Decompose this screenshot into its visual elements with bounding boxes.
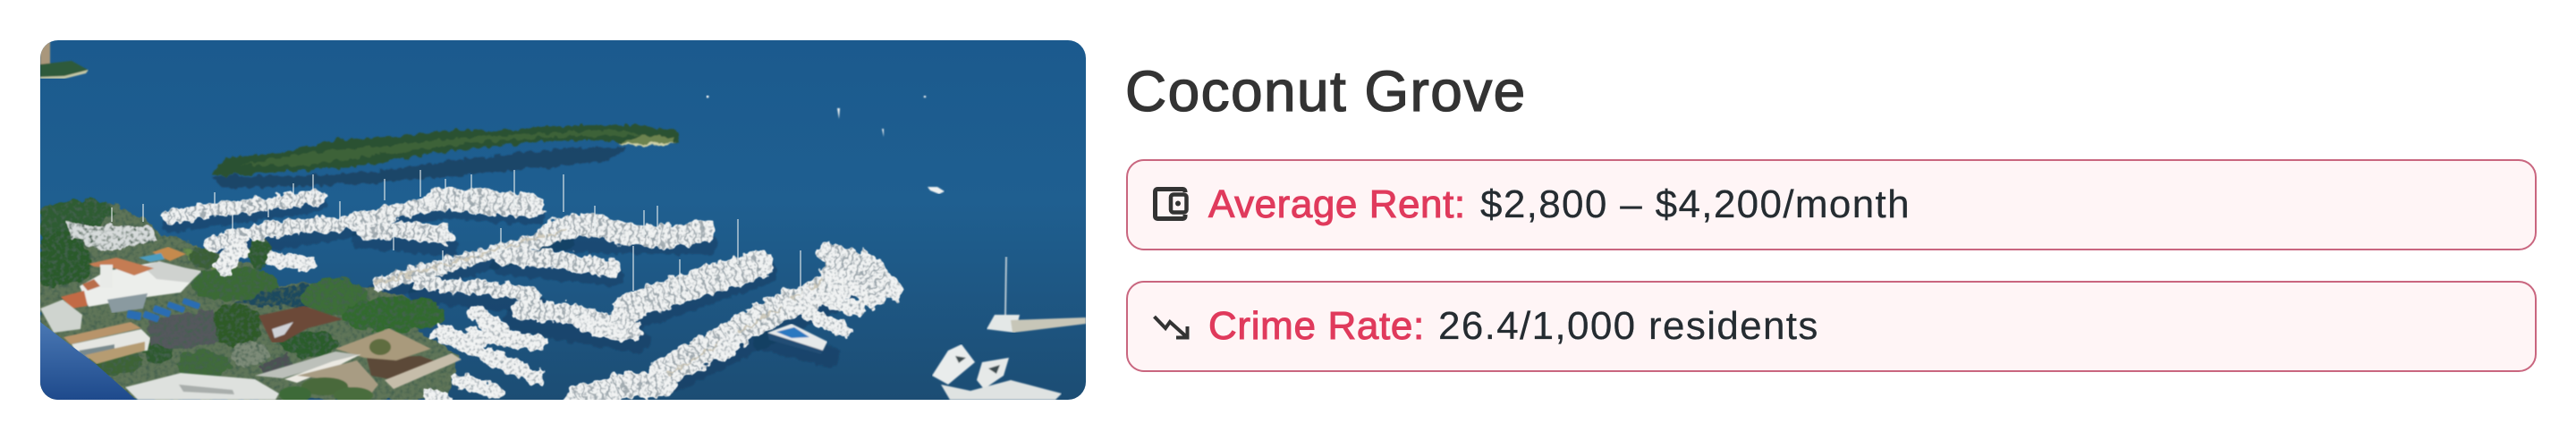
white rooftops xyxy=(125,353,462,400)
average rent label: Average Rent: xyxy=(1208,182,1466,226)
masts xyxy=(112,170,801,295)
photo: aerial view of Coconut Grove marina xyxy=(40,40,1086,400)
shore land xyxy=(40,199,460,400)
white club building with terracotta roof xyxy=(61,247,201,313)
crime rate label: Crime Rate: xyxy=(1208,304,1425,348)
panel: average rent xyxy=(1126,159,2537,250)
blue-topped yacht xyxy=(767,324,827,354)
blue covered boats xyxy=(126,298,200,323)
bottom right yachts xyxy=(932,344,1062,400)
average rent value: $2,800 – $4,200/month xyxy=(1480,182,1911,226)
small boat and sails on open water xyxy=(707,95,945,194)
dark blue foreground corner xyxy=(40,322,136,400)
island xyxy=(212,125,679,188)
far shore with tower xyxy=(40,41,89,79)
marina boats and piers xyxy=(170,197,893,400)
tan roof buildings xyxy=(40,300,150,364)
reflections under marina xyxy=(170,205,842,385)
icon: wallet xyxy=(1153,187,1189,221)
panel: crime rate xyxy=(1126,281,2537,372)
brown lodge roof xyxy=(258,306,343,343)
far right catamaran and dock xyxy=(987,257,1086,333)
icon: trending down arrow xyxy=(1153,315,1190,340)
thatched restaurant roofs xyxy=(255,328,438,403)
crime rate value: 26.4/1,000 residents xyxy=(1438,304,1819,348)
water xyxy=(40,40,1086,400)
title: Coconut Grove xyxy=(1125,59,1527,123)
